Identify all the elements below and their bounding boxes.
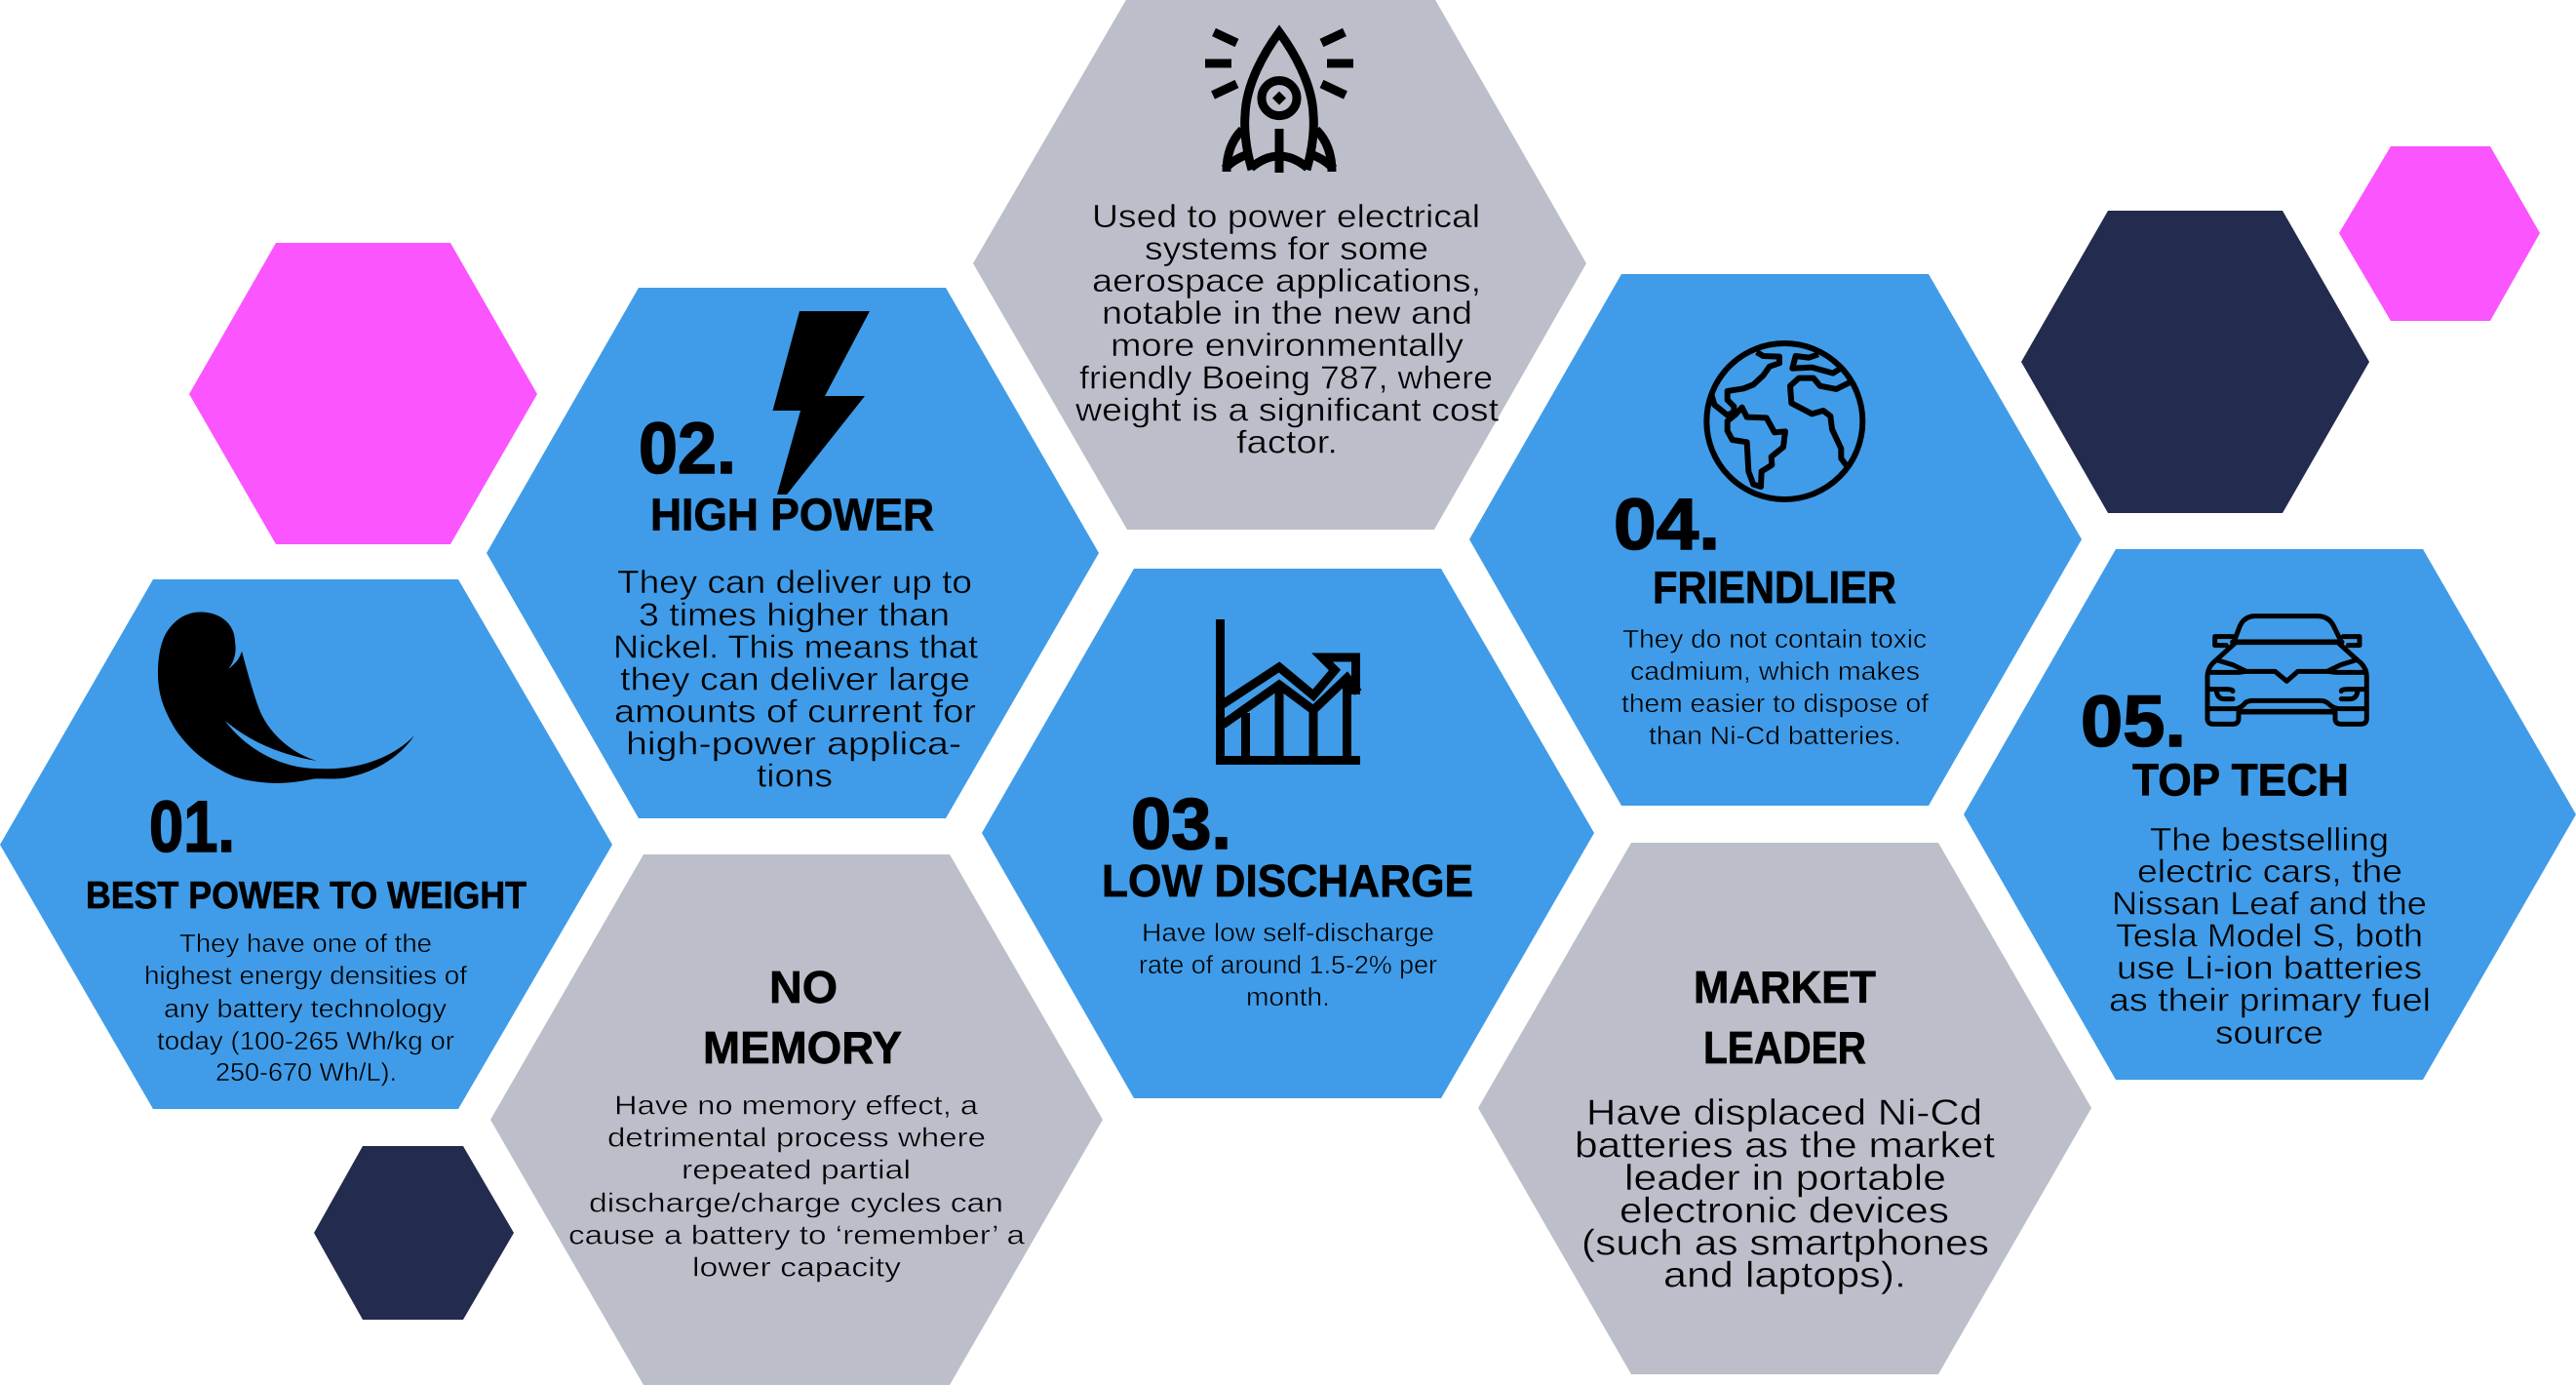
panel: 01 best power to weight: [0, 579, 612, 1109]
panel: 03 low discharge: [982, 569, 1594, 1098]
body text aerospace: aerospace applications,: [1092, 262, 1481, 298]
hexagon 02: [487, 288, 1099, 818]
icon: electric car: [2207, 616, 2366, 724]
body text 05: source: [2215, 1014, 2323, 1050]
panel: aerospace: [973, 0, 1586, 530]
hexagon no memory: [490, 854, 1103, 1385]
decorative hexagon: large pink: [189, 243, 537, 544]
body text 04: They do not contain toxic: [1622, 626, 1927, 653]
heading: market leader: LEADER: [1703, 1022, 1866, 1073]
heading: market leader: MARKET: [1694, 962, 1876, 1012]
body text 05: electric cars, the: [2137, 852, 2402, 890]
body text 05: The bestselling: [2150, 821, 2389, 857]
heading: top tech: TOP TECH: [2132, 755, 2349, 806]
body text 02: 3 times higher than: [639, 597, 950, 632]
body text market leader: [1575, 1092, 1996, 1295]
body text 02: [613, 564, 978, 794]
body text 05: as their primary fuel: [2109, 981, 2431, 1018]
decorative hexagon: small navy: [314, 1146, 514, 1320]
body text 02: They can deliver up to: [617, 564, 972, 600]
hexagon 01: [0, 579, 612, 1109]
heading: no memory: MEMORY: [703, 1022, 902, 1073]
panel: market leader: [1478, 843, 2091, 1374]
decorative hexagon: large navy: [2021, 211, 2369, 513]
body text no memory: cause a battery to ‘remember’ a: [568, 1219, 1025, 1250]
hexagon 03: [982, 569, 1594, 1098]
number 03: 03.: [1131, 783, 1231, 864]
body text market leader: leader in portable: [1624, 1158, 1946, 1198]
number 05: 05.: [2081, 681, 2186, 762]
body text 05: use Li-ion batteries: [2117, 950, 2422, 985]
body text 03: [1139, 920, 1438, 1011]
body text 05: Nissan Leaf and the: [2112, 886, 2427, 921]
body text market leader: and laptops).: [1663, 1254, 1906, 1295]
body text aerospace: [1074, 198, 1499, 460]
body text 01: any battery technology: [164, 996, 447, 1023]
body text 04: them easier to dispose of: [1621, 691, 1930, 718]
icon: globe: [1706, 343, 1862, 499]
panel: 02 high power: [487, 288, 1099, 818]
body text 04: [1621, 626, 1930, 750]
body text 02: high-power applica-: [626, 726, 961, 761]
body text no memory: discharge/charge cycles can: [589, 1188, 1003, 1217]
body text 03: Have low self-discharge: [1142, 920, 1434, 947]
body text 03: month.: [1246, 984, 1330, 1011]
panel: 04 friendlier: [1469, 274, 2082, 806]
body text 01: They have one of the: [179, 931, 432, 958]
body text 01: 250-670 Wh/L).: [215, 1059, 397, 1087]
body text no memory: [568, 1090, 1025, 1282]
body text aerospace: systems for some: [1145, 230, 1428, 266]
body text market leader: electronic devices: [1620, 1190, 1949, 1231]
number 02: 02.: [639, 408, 736, 489]
body text 01: [144, 931, 468, 1087]
icon: lightning bolt: [772, 311, 870, 495]
body text 04: than Ni-Cd batteries.: [1649, 723, 1901, 750]
body text market leader: Have displaced Ni-Cd: [1586, 1092, 1982, 1132]
icon: rocket: [1205, 32, 1353, 173]
body text 04: cadmium, which makes: [1630, 658, 1920, 686]
icon: feather swoosh: [158, 613, 414, 783]
body text market leader: batteries as the market: [1575, 1126, 1996, 1165]
heading: low discharge: LOW DISCHARGE: [1102, 855, 1473, 906]
hexagon aerospace: [973, 0, 1586, 530]
body text 02: tions: [757, 757, 833, 794]
icon: rising chart: [1221, 619, 1360, 761]
body text no memory: detrimental process where: [607, 1122, 986, 1153]
hexagon 04: [1469, 274, 2082, 806]
body text 02: they can deliver large: [620, 661, 970, 696]
body text aerospace: notable in the new and: [1102, 295, 1472, 331]
heading: no memory: NO: [769, 962, 838, 1012]
decorative hexagon: small pink: [2339, 146, 2540, 321]
heading: market leader: [1694, 962, 1876, 1073]
hexagon 05: [1964, 549, 2576, 1080]
body text 03: rate of around 1.5-2% per: [1139, 952, 1438, 979]
body text aerospace: factor.: [1236, 423, 1338, 460]
heading: best power to weight: BEST POWER TO WEIGHT: [86, 875, 527, 917]
panel: no memory: [490, 854, 1103, 1385]
body text no memory: repeated partial: [682, 1155, 911, 1184]
heading: high power: HIGH POWER: [650, 490, 934, 540]
body text 02: Nickel. This means that: [613, 628, 978, 665]
body text market leader: (such as smartphones: [1581, 1223, 1989, 1262]
hexagon market leader: [1478, 843, 2091, 1374]
panel: 05 top tech: [1964, 549, 2576, 1080]
number 01: 01.: [149, 786, 235, 867]
body text no memory: lower capacity: [692, 1252, 901, 1282]
body text aerospace: more environmentally: [1111, 327, 1464, 363]
body text aerospace: weight is a significant cost: [1074, 392, 1499, 427]
number 04: 04.: [1614, 484, 1720, 565]
body text aerospace: Used to power electrical: [1092, 198, 1480, 234]
body text aerospace: friendly Boeing 787, where: [1079, 359, 1493, 396]
heading: friendlier: FRIENDLIER: [1653, 562, 1896, 613]
heading: no memory: [703, 962, 902, 1073]
body text 02: amounts of current for: [614, 693, 976, 730]
body text 01: today (100-265 Wh/kg or: [157, 1028, 455, 1055]
body text no memory: Have no memory effect, a: [614, 1090, 978, 1120]
body text 05: [2109, 821, 2431, 1050]
body text 01: highest energy densities of: [144, 963, 468, 990]
body text 05: Tesla Model S, both: [2116, 917, 2423, 954]
